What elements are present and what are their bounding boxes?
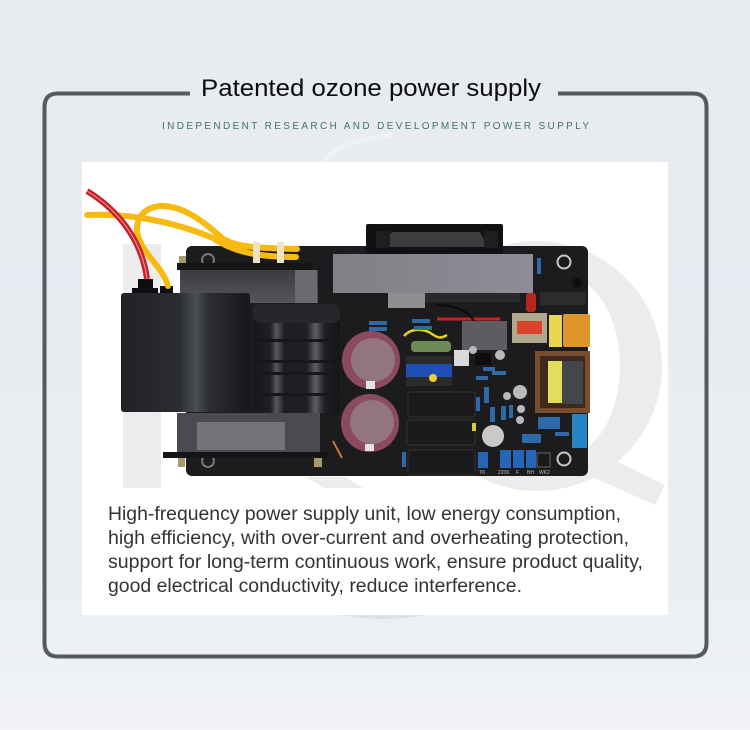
large transformer <box>535 351 590 413</box>
heat sink bracket <box>388 293 425 308</box>
transformer core pillar <box>295 270 317 303</box>
circuit board <box>186 246 588 476</box>
red and black wires <box>436 305 500 335</box>
relay module <box>462 321 507 350</box>
yellow capacitor <box>549 315 562 347</box>
green resistor <box>411 341 451 352</box>
description text: High-frequency power supply unit, low energy consumption, <box>108 504 621 525</box>
blue module <box>406 356 452 386</box>
orange relay <box>563 314 590 347</box>
mounting holes <box>202 254 570 467</box>
faint background arc top <box>325 135 392 160</box>
yellow jumper wire <box>404 330 447 338</box>
board silk labels: 220K <box>498 470 510 476</box>
board silk labels: TK <box>479 470 486 476</box>
description text: good electrical conductivity, reduce interference. <box>108 576 522 597</box>
second black coil <box>253 304 340 413</box>
board silk labels: WK2 <box>539 470 550 476</box>
description text: support for long-term continuous work, ensure product quality, <box>108 552 643 573</box>
blue trimmers <box>478 450 536 468</box>
power supply board product photo <box>87 191 590 476</box>
red wire <box>87 191 147 279</box>
cable ties <box>253 242 284 263</box>
transformer bottom plate <box>163 452 328 458</box>
watermark letters <box>123 241 665 505</box>
yellow wires <box>87 206 297 286</box>
heat sink <box>333 254 533 293</box>
cooling fan <box>366 224 503 254</box>
transformer core top <box>180 270 318 303</box>
terminal caps <box>132 279 173 293</box>
mosfet strip <box>425 293 520 302</box>
power resistors <box>407 392 475 475</box>
top right parts <box>526 258 586 312</box>
integrated circuit <box>475 353 491 365</box>
large black coil <box>121 293 250 412</box>
transformer top plate <box>177 263 312 270</box>
faint background arc bottom <box>340 615 425 619</box>
core bottom highlight <box>197 422 285 450</box>
small silver capacitors <box>469 346 527 424</box>
orange wire <box>333 441 342 458</box>
small blue components <box>369 319 569 467</box>
title: Patented ozone power supply <box>201 75 542 102</box>
transformer core bottom <box>177 413 320 452</box>
frame outline <box>44 94 706 656</box>
description text: high efficiency, with over-current and overheating protection, <box>108 528 629 549</box>
board silk labels: BH <box>527 470 534 476</box>
subtitle: INDEPENDENT RESEARCH AND DEVELOPMENT POWER SUPPLY <box>162 121 589 132</box>
white terminal box <box>537 453 550 467</box>
white connector <box>454 350 469 366</box>
small transformer <box>512 313 547 343</box>
brass screws <box>178 256 322 467</box>
buzzer <box>482 425 504 447</box>
description text <box>108 504 643 597</box>
board silk labels <box>479 470 550 476</box>
capacitors <box>341 331 400 452</box>
blue terminal block <box>572 414 587 448</box>
white content panel <box>82 162 668 615</box>
board silk labels: F <box>516 470 519 476</box>
